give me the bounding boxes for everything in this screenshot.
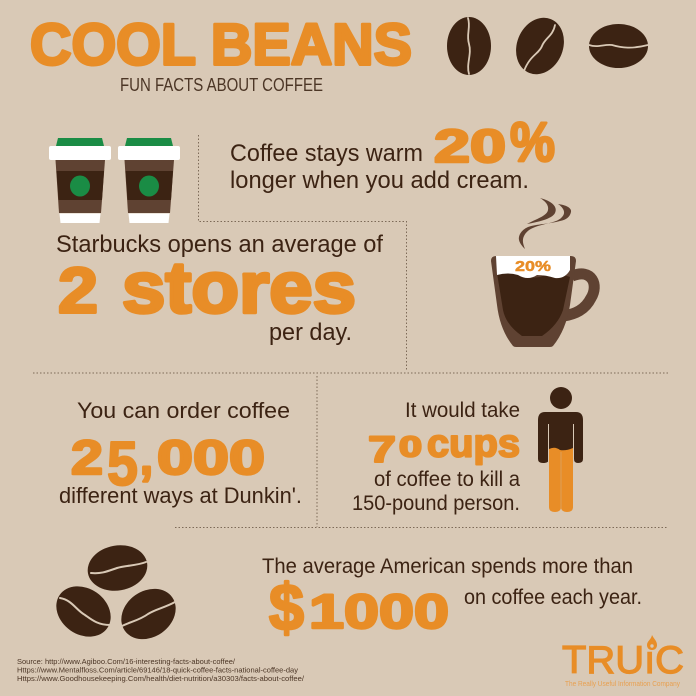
fact: 70 cups: of coffee to kill a xyxy=(374,468,520,491)
subtitle: FUN FACTS ABOUT COFFEE xyxy=(120,75,323,95)
sources: Source: http://www.Agiboo.Com/16-interesting-facts-about-coffee/ xyxy=(17,657,236,666)
title: COOL BEANS xyxy=(30,12,412,78)
fact: 25,000 ways: 5 xyxy=(107,430,138,499)
fact: 25,000 ways: 000 xyxy=(157,432,265,485)
fact: coffee stays warm: Coffee stays warm xyxy=(230,140,423,167)
sources xyxy=(17,657,305,683)
fact: average American spend: 1000 xyxy=(309,586,449,639)
fact: Starbucks stores xyxy=(56,231,383,346)
icon: three coffee beans xyxy=(447,10,648,82)
fact: coffee stays warm: longer when you add cream. xyxy=(230,167,529,194)
fact: Starbucks stores: stores xyxy=(122,248,356,328)
fact: coffee stays warm xyxy=(230,110,555,194)
fact: 70 cups xyxy=(352,399,520,515)
fact: 25,000 ways: different ways at Dunkin'. xyxy=(59,483,302,508)
fact: Starbucks stores: per day. xyxy=(269,319,352,346)
fact: average American spend: on coffee each year. xyxy=(464,586,642,609)
fact: average American spend xyxy=(262,554,642,644)
fact: 70 cups: cups xyxy=(427,422,520,466)
icon: two Starbucks cups xyxy=(49,138,180,223)
fact: average American spend: The average American spends more than xyxy=(262,554,633,578)
TRUiC logo: The Really Useful Information Company xyxy=(565,679,680,688)
fact: 25,000 ways: 2 xyxy=(71,432,103,485)
sources: Https://www.Goodhousekeeping.Com/health/diet-nutrition/a30303/facts-about-coffee/ xyxy=(17,674,305,683)
fact: 25,000 ways xyxy=(59,398,302,508)
fact: coffee stays warm: 20 xyxy=(434,120,506,172)
TRUiC logo: TRUıC xyxy=(562,639,684,682)
fact: 70 cups: 0 xyxy=(399,432,422,464)
fact: coffee stays warm: % xyxy=(510,110,555,173)
fact: Starbucks stores: 2 xyxy=(58,254,98,326)
icon: person filled with coffee xyxy=(538,387,583,512)
icon: coffee cup with cream xyxy=(491,198,594,347)
fact: Starbucks stores: Starbucks opens an average of xyxy=(56,231,383,258)
sources: Https://www.Mentalfloss.Com/article/69146/18-quick-coffee-facts-national-coffee-day xyxy=(17,666,298,674)
fact: 70 cups: 7 xyxy=(368,429,396,470)
fact: 25,000 ways: , xyxy=(140,432,153,485)
icon: three beans xyxy=(47,541,185,649)
fact: 70 cups: 150-pound person. xyxy=(352,492,520,515)
fact: average American spend: $ xyxy=(269,570,304,644)
fact: 70 cups: It would take xyxy=(405,399,520,422)
fact: 25,000 ways: You can order coffee xyxy=(77,398,290,423)
icon: coffee cup with cream: 20% xyxy=(515,258,551,275)
